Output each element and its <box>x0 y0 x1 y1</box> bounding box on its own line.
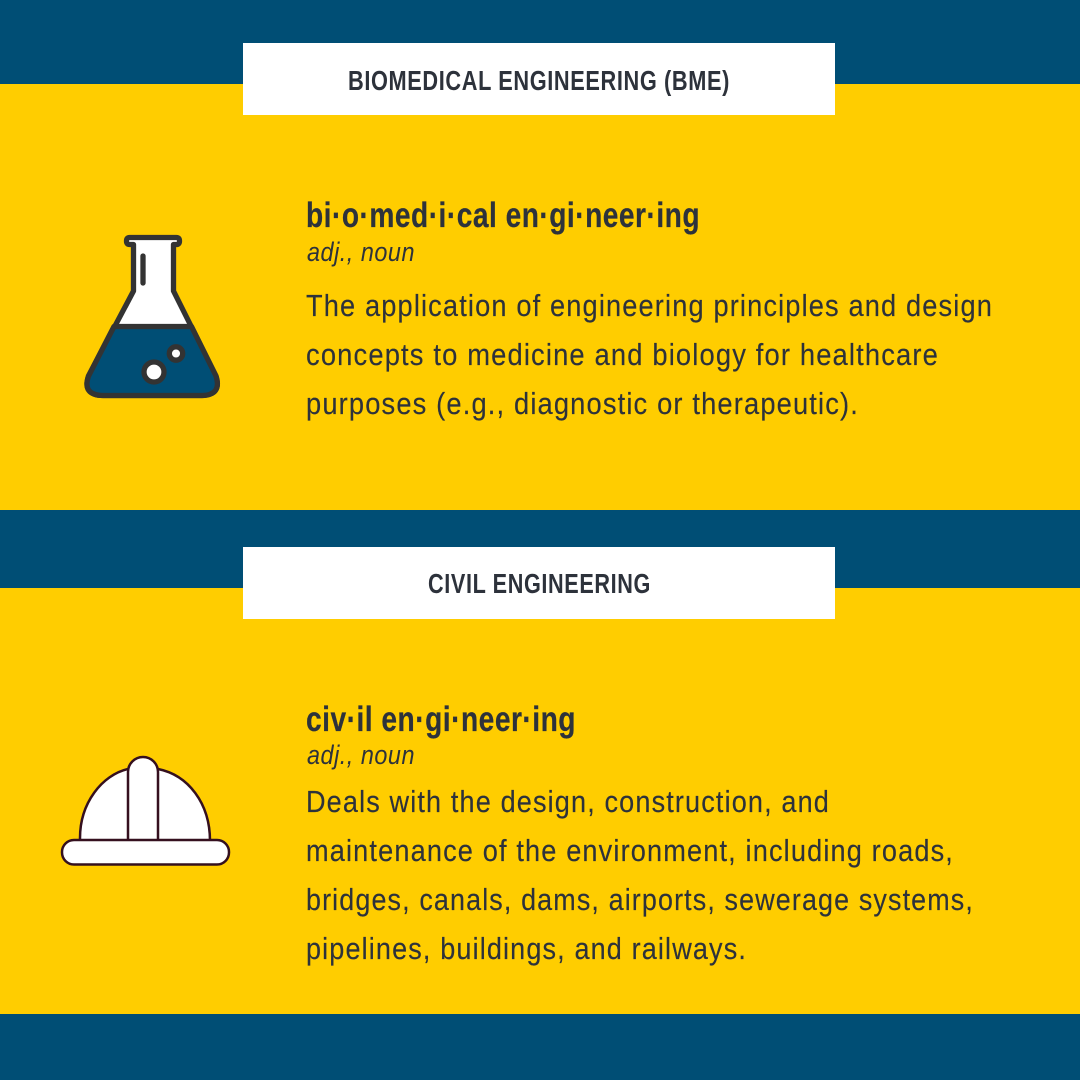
definition: civil: Deals with the design, construction, and <box>306 784 830 819</box>
definition: civil: bridges, canals, dams, airports, sewerage systems, <box>306 882 974 917</box>
definition: civil: maintenance of the environment, including roads, <box>306 833 954 868</box>
definition: biomedical <box>306 288 993 421</box>
heading: civil engineering <box>243 547 835 619</box>
definition: biomedical: The application of engineering principles and design <box>306 288 993 323</box>
definition: biomedical: purposes (e.g., diagnostic or therapeutic). <box>306 386 859 421</box>
definition: biomedical: concepts to medicine and biology for healthcare <box>306 337 939 372</box>
text block: civil definition <box>306 700 974 966</box>
heading: biomedical engineering <box>243 43 835 115</box>
icon: flask <box>87 238 217 396</box>
heading: biomedical engineering: BIOMEDICAL ENGINEERING (BME) <box>348 65 730 96</box>
definition: civil <box>306 784 974 966</box>
icon: hard hat <box>62 757 229 864</box>
part of speech: civil: adj., noun <box>307 740 415 770</box>
term: civil engineering: civ·il en·gi·neer·ing <box>306 700 576 739</box>
term: biomedical engineering: bi·o·med·i·cal en·gi·neer·ing <box>306 196 700 235</box>
definition: civil: pipelines, buildings, and railways. <box>306 931 747 966</box>
panel: civil yellow band <box>0 588 1080 1014</box>
part of speech: biomedical: adj., noun <box>307 237 415 267</box>
heading: civil engineering: CIVIL ENGINEERING <box>428 568 651 599</box>
panel: biomedical yellow band <box>0 84 1080 510</box>
text block: biomedical definition <box>306 196 993 421</box>
